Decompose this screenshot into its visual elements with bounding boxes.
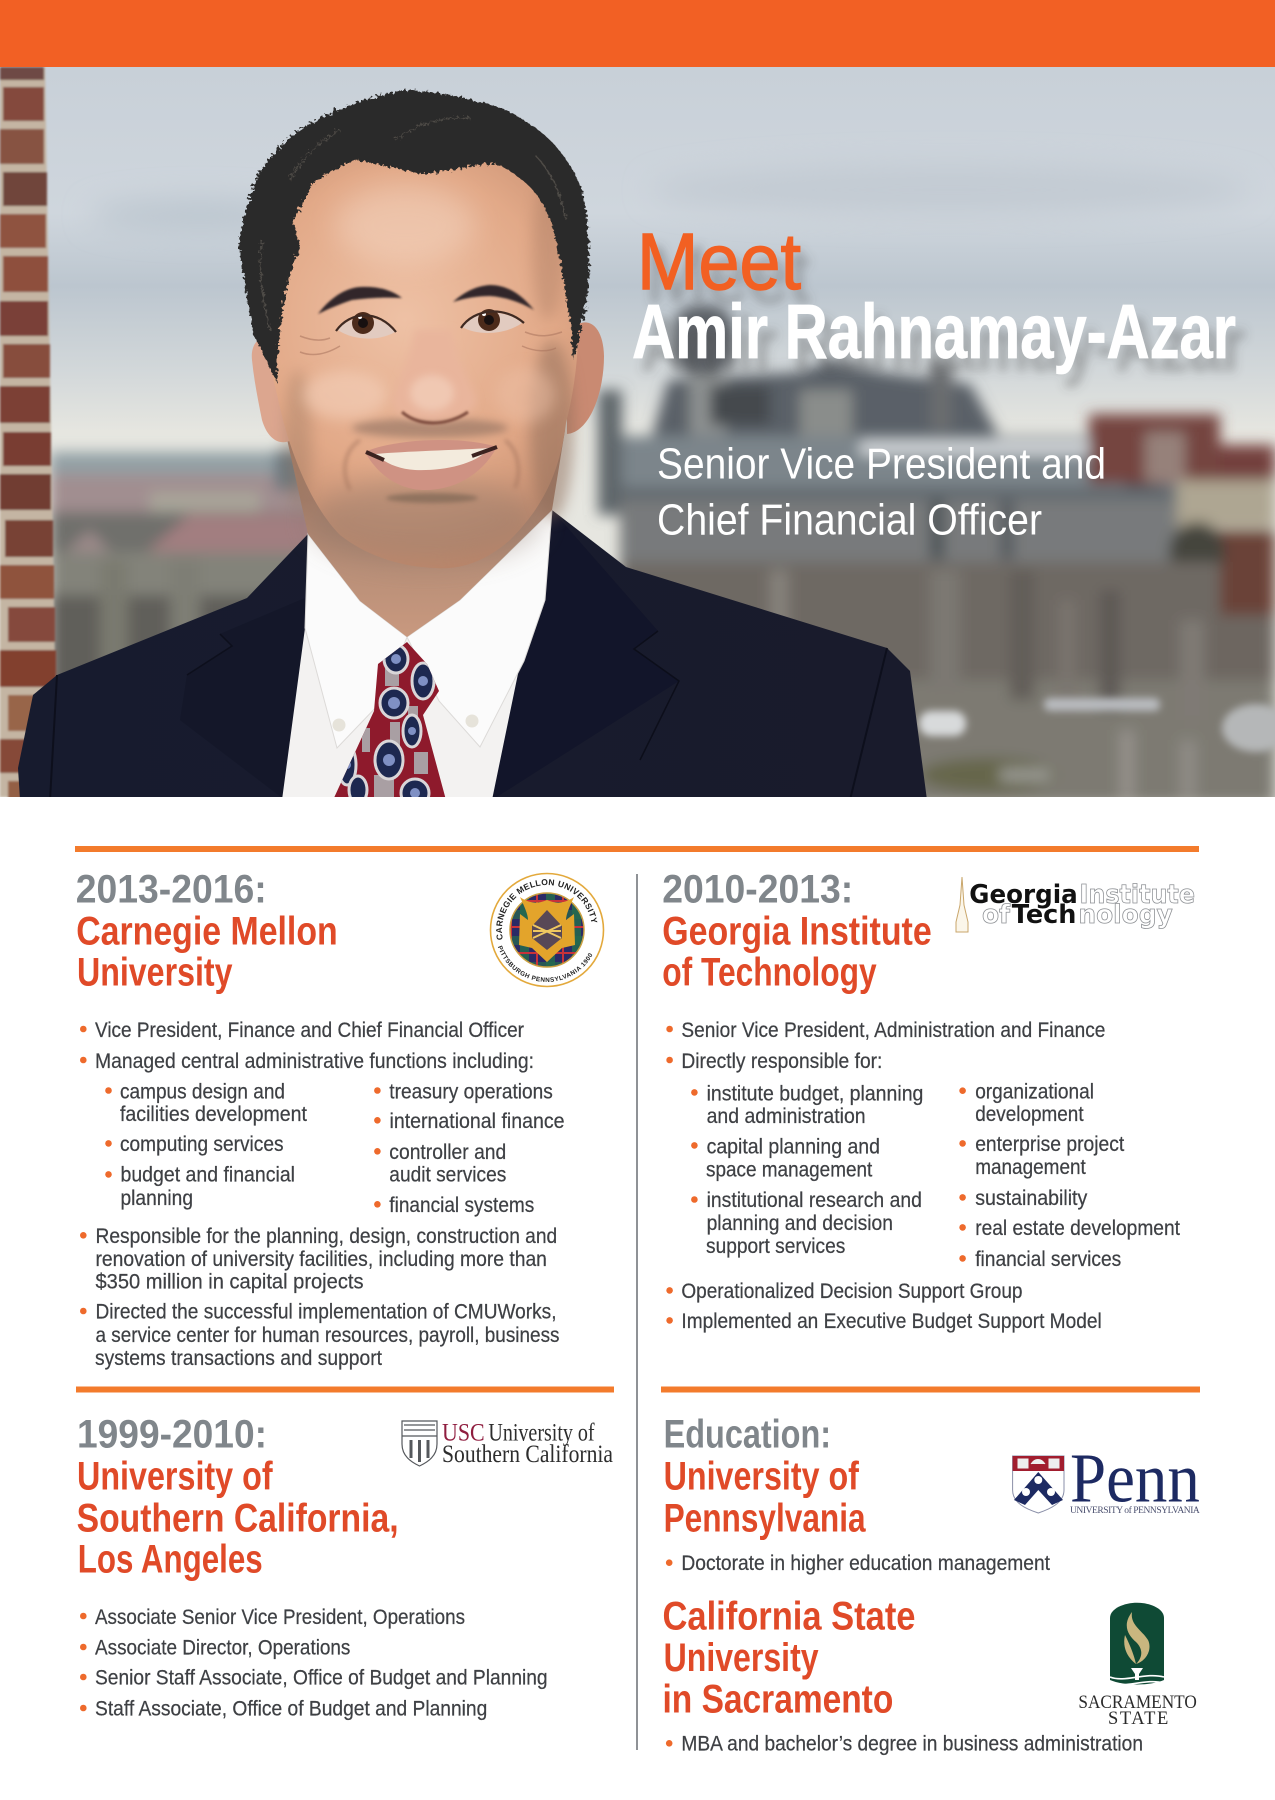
logo: Georgia Tech wordmark: Georgia [969,880,1078,910]
heading: Georgia Tech: Georgia Institute [662,909,932,953]
column divider [636,874,638,1750]
bullet list: CMU roles: $350 million in capital projects [96,1269,364,1293]
bullet list: Georgia Tech roles: real estate development [975,1216,1180,1240]
panel: Carnegie Mellon University [76,868,604,1370]
heading: Penn: Pennsylvania [664,1497,866,1541]
bullet list: CMU roles: international finance [390,1109,564,1133]
bullet list: CMU roles: renovation of university facilities, including more than [96,1247,547,1271]
bullet list: CMU roles: treasury operations [389,1079,553,1103]
man: jacket [18,510,927,800]
bullet list: CMU roles: audit services [389,1163,506,1187]
title block [632,217,1236,375]
man: eyes [336,309,524,339]
heading: California State: in Sacramento [662,1678,893,1722]
bullet list: Georgia Tech roles: Senior Vice President, Administration and Finance [681,1018,1105,1042]
logo: Penn shield and wordmark: Penn [1070,1441,1200,1518]
heading: California State: University [664,1636,819,1680]
panel: Education [661,1386,1200,1756]
bullet list: USC roles: Associate Director, Operations [95,1636,350,1660]
logo: Sacramento State [1078,1603,1197,1729]
logo: Georgia Tech wordmark: of [982,900,1011,930]
bullet list: Georgia Tech roles: and administration [707,1104,866,1128]
bullet list: CMU roles: Responsible for the planning, design, construction and [96,1224,557,1248]
heading: California State: California State [662,1594,915,1638]
logo: USC shield and wordmark: University of [488,1420,595,1447]
heading: Carnegie Mellon: Carnegie Mellon [76,909,338,953]
heading: USC: University of [77,1454,273,1498]
logo: Sacramento State: SACRAMENTO [1078,1693,1197,1713]
heading: California State [662,1594,916,1722]
bullet: Sacramento degree: MBA and bachelor’s degree in business administration [681,1732,1143,1756]
logo: Sacramento State: STATE [1108,1709,1168,1729]
heading: Carnegie Mellon [76,868,338,994]
logo: Carnegie Mellon seal: PITTSBURGH PENNSYLVANIA 1900 [498,946,592,982]
man: hair [239,90,589,383]
bullet list: Georgia Tech roles: institute budget, planning [707,1081,923,1105]
bullet list: USC roles: Staff Associate, Office of Budget and Planning [95,1697,487,1721]
job title: Chief Financial Officer [657,496,1042,544]
bullet list: Georgia Tech roles: organizational [975,1079,1094,1103]
bullet list: CMU roles: planning [120,1186,193,1210]
man: nose [342,372,521,490]
heading: Penn: Education: [664,1412,831,1456]
top orange banner [0,0,1275,67]
logo: Penn shield and wordmark [1013,1441,1200,1518]
bullet list: Georgia Tech roles: Operationalized Decision Support Group [681,1279,1023,1303]
bullet list: USC roles: Senior Staff Associate, Office of Budget and Planning [95,1666,548,1690]
hero photo: portrait of Amir Rahnamay-Azar [0,67,1275,807]
heading: Penn: University of [664,1454,859,1498]
bullet list: Georgia Tech roles: development [975,1102,1084,1126]
bullet list: CMU roles: controller and [389,1140,506,1164]
panel: University of Southern California [76,1386,614,1721]
man: eyebrows [318,285,534,314]
job title: Senior Vice President and [657,440,1106,488]
section rule top [75,846,1199,852]
bullet list: CMU roles: facilities development [120,1102,307,1126]
logo: USC shield and wordmark [402,1420,613,1468]
bullet list: Georgia Tech roles [666,1018,1180,1333]
heading: Penn [664,1412,866,1541]
heading: USC [77,1412,399,1582]
bullet list: CMU roles: budget and financial [120,1163,295,1187]
heading: Carnegie Mellon: 2013-2016: [76,868,267,912]
logo: Penn shield and wordmark: UNIVERSITY of PENNSYLVANIA [1070,1505,1200,1516]
bullet list: CMU roles [80,1018,564,1370]
man: face [276,158,582,568]
bullet list: USC roles: Associate Senior Vice President, Operations [95,1605,465,1629]
heading: Georgia Tech: of Technology [662,950,877,994]
title: Meet: Meet [637,217,801,306]
man: neck [285,430,565,637]
heading: USC: 1999-2010: [77,1412,267,1456]
bullet list: Georgia Tech roles: institutional research and [707,1188,922,1212]
bullet list: Georgia Tech roles: space management [706,1157,872,1181]
bullet list: Georgia Tech roles: management [975,1155,1086,1179]
man: smile [365,440,497,490]
man: patterned red tie [334,642,446,797]
logo: USC shield and wordmark: Southern California [442,1441,613,1468]
bullet list: CMU roles: Vice President, Finance and Chief Financial Officer [95,1018,524,1042]
logo: Georgia Tech wordmark: Tech [1012,900,1076,930]
bullet: Penn degree: Doctorate in higher education management [681,1551,1050,1575]
heading: Georgia Tech [662,868,932,994]
bullet list: USC roles [80,1605,548,1721]
brick wall at left edge [0,67,57,801]
heading: Georgia Tech: 2010-2013: [662,868,853,912]
photo background: blurred campus skyline [0,67,1275,805]
rule: education section [661,1386,1200,1392]
bullet list: Georgia Tech roles: Implemented an Executive Budget Support Model [681,1309,1102,1333]
logo: Georgia Tech wordmark: Institute [1080,880,1195,910]
bullet list: CMU roles: a service center for human resources, payroll, business [96,1323,560,1347]
heading: Carnegie Mellon: University [77,950,233,994]
man: shirt and collar [282,510,552,800]
bullet list: CMU roles: financial systems [389,1193,534,1217]
bullet list: Georgia Tech roles: enterprise project [975,1132,1124,1156]
bullet list: Georgia Tech roles: sustainability [975,1186,1088,1210]
bullet list: CMU roles: Managed central administrative functions including: [95,1049,534,1073]
heading: USC: Southern California, [77,1497,399,1541]
bullet list: CMU roles: campus design and [120,1079,285,1103]
bullet list: CMU roles: Directed the successful implementation of CMUWorks, [96,1300,556,1324]
heading: USC: Los Angeles [78,1538,263,1582]
bullet list: Georgia Tech roles: planning and decision [707,1211,893,1235]
bullet list: CMU roles: computing services [120,1132,284,1156]
rule: USC section [76,1386,614,1392]
logo: Georgia Tech wordmark [956,877,1195,932]
logo: Carnegie Mellon seal [490,872,604,988]
job title [657,440,1106,544]
panel: Georgia Institute of Technology [662,868,1195,1333]
bullet list: Georgia Tech roles: Directly responsible for: [681,1049,882,1073]
bullet list: Georgia Tech roles: support services [706,1234,845,1258]
logo: USC shield and wordmark: USC [442,1420,485,1447]
bullet list: CMU roles: systems transactions and support [95,1346,382,1370]
man: eye wrinkles [300,332,562,354]
logo: Carnegie Mellon seal: CARNEGIE MELLON UNIVERSITY [496,879,598,940]
logo: Georgia Tech wordmark: nology [1078,900,1173,930]
bullet list: Georgia Tech roles: capital planning and [707,1134,880,1158]
bullet list: Georgia Tech roles: financial services [975,1247,1121,1271]
man: ears [252,322,604,442]
